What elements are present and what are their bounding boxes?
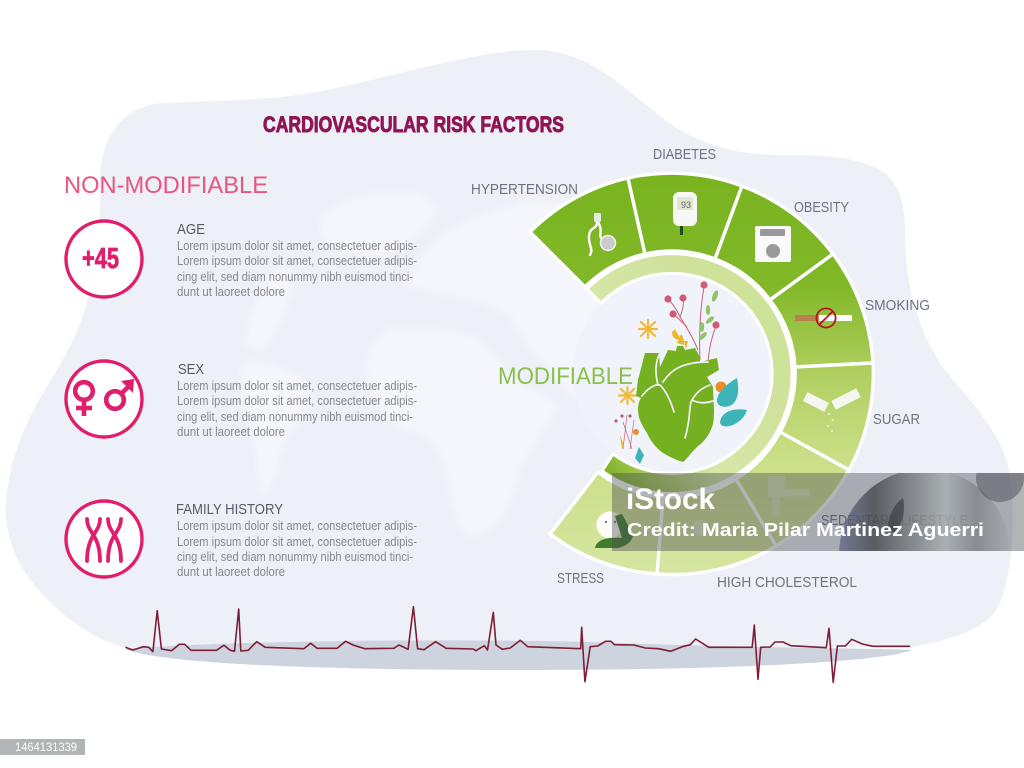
family history text: Lorem ipsum dolor sit amet, consectetuer adipis-: [177, 519, 417, 533]
panel: age: [66, 221, 417, 299]
inner disc: [573, 275, 771, 473]
icon: chromosomes: [66, 501, 142, 577]
sex text: cing elit, sed diam nonummy nibh euismod tinci-: [177, 410, 413, 424]
family history heading: FAMILY HISTORY: [176, 501, 283, 518]
segment: stress: [550, 472, 663, 574]
world map: [241, 192, 650, 535]
segment: obesity: [715, 186, 833, 300]
sex heading: SEX: [178, 361, 204, 378]
icon: cholesterol: [692, 520, 708, 536]
background blob: [6, 50, 1013, 647]
flower stems: [623, 287, 716, 449]
ecg shadow: [125, 640, 912, 670]
family history text: cing elit, sed diam nonummy nibh euismod tinci-: [177, 550, 413, 564]
icon: gender symbols: [66, 361, 142, 437]
segment: high cholesterol: [657, 479, 776, 575]
teal leaves: [717, 378, 747, 426]
icon: no smoking: [795, 308, 852, 328]
panel: sex: [66, 361, 417, 439]
heart illustration: [614, 281, 747, 464]
label: obesity: OBESITY: [794, 199, 849, 216]
icon: glucose meter: [673, 192, 697, 235]
family history text: [177, 519, 417, 579]
label: smoking: SMOKING: [865, 297, 930, 314]
age text: cing elit, sed diam nonummy nibh euismod tinci-: [177, 270, 413, 284]
small posy: [614, 414, 644, 464]
label: diabetes: DIABETES: [653, 146, 716, 163]
heading: non-modifiable: NON-MODIFIABLE: [64, 172, 268, 199]
ecg line: [125, 607, 910, 682]
watermark: istock: iStock: [626, 483, 715, 516]
label: sedentary lifestyle: SEDENTARY LIFESTYLE: [821, 512, 968, 529]
age text: [177, 239, 417, 299]
family history text: dunt ut laoreet dolore: [177, 565, 285, 579]
label: stress: STRESS: [557, 570, 604, 587]
sex text: dunt ut laoreet dolore: [177, 425, 285, 439]
age text: Lorem ipsum dolor sit amet, consectetuer adipis-: [177, 239, 417, 253]
orange flower: [716, 382, 726, 392]
sex text: [177, 379, 417, 439]
icon: weighing scale: [755, 226, 791, 262]
label: high cholesterol: HIGH CHOLESTEROL: [717, 574, 857, 591]
family history text: Lorem ipsum dolor sit amet, consectetuer adipis-: [177, 535, 417, 549]
green leaves: [698, 290, 719, 341]
icon: blood pressure monitor: [589, 213, 616, 255]
icon: sugar packets: [803, 388, 861, 432]
heading: modifiable: MODIFIABLE: [498, 363, 633, 390]
segment: sugar: [780, 363, 873, 470]
image id tag: 1464131339: [15, 740, 77, 754]
inner ring: [587, 254, 792, 494]
labels: hypertension: HYPERTENSION: [471, 181, 578, 198]
sex text: Lorem ipsum dolor sit amet, consectetuer adipis-: [177, 394, 417, 408]
heart: [636, 346, 719, 462]
icon: +45: +45: [82, 243, 119, 275]
segment: hypertension: [530, 178, 645, 287]
pink blossoms: [664, 281, 720, 329]
segment: diabetes: [628, 173, 742, 259]
watermark: credit: Credit: Maria Pilar Martinez Aguerri: [627, 519, 984, 540]
segment: sedentary lifestyle: [736, 432, 849, 546]
age text: Lorem ipsum dolor sit amet, consectetuer adipis-: [177, 254, 417, 268]
icon: +45: [66, 221, 142, 297]
modifiable wheel: [530, 173, 873, 575]
yellow flowers: [619, 320, 657, 404]
icon: chair, sedentary lifestyle: [768, 476, 810, 516]
icon: stress: [595, 512, 633, 548]
age text: dunt ut laoreet dolore: [177, 285, 285, 299]
sex text: Lorem ipsum dolor sit amet, consectetuer adipis-: [177, 379, 417, 393]
segment: smoking: [770, 254, 873, 367]
label: sugar: SUGAR: [873, 411, 920, 428]
age heading: AGE: [177, 221, 205, 238]
image id tag: [0, 739, 85, 755]
heart veins: [642, 353, 713, 438]
panel: family history: [66, 501, 417, 579]
title: CARDIOVASCULAR RISK FACTORS: [263, 112, 564, 137]
icon: glucose meter: 93: [681, 200, 691, 210]
watermark band: [612, 473, 1024, 551]
